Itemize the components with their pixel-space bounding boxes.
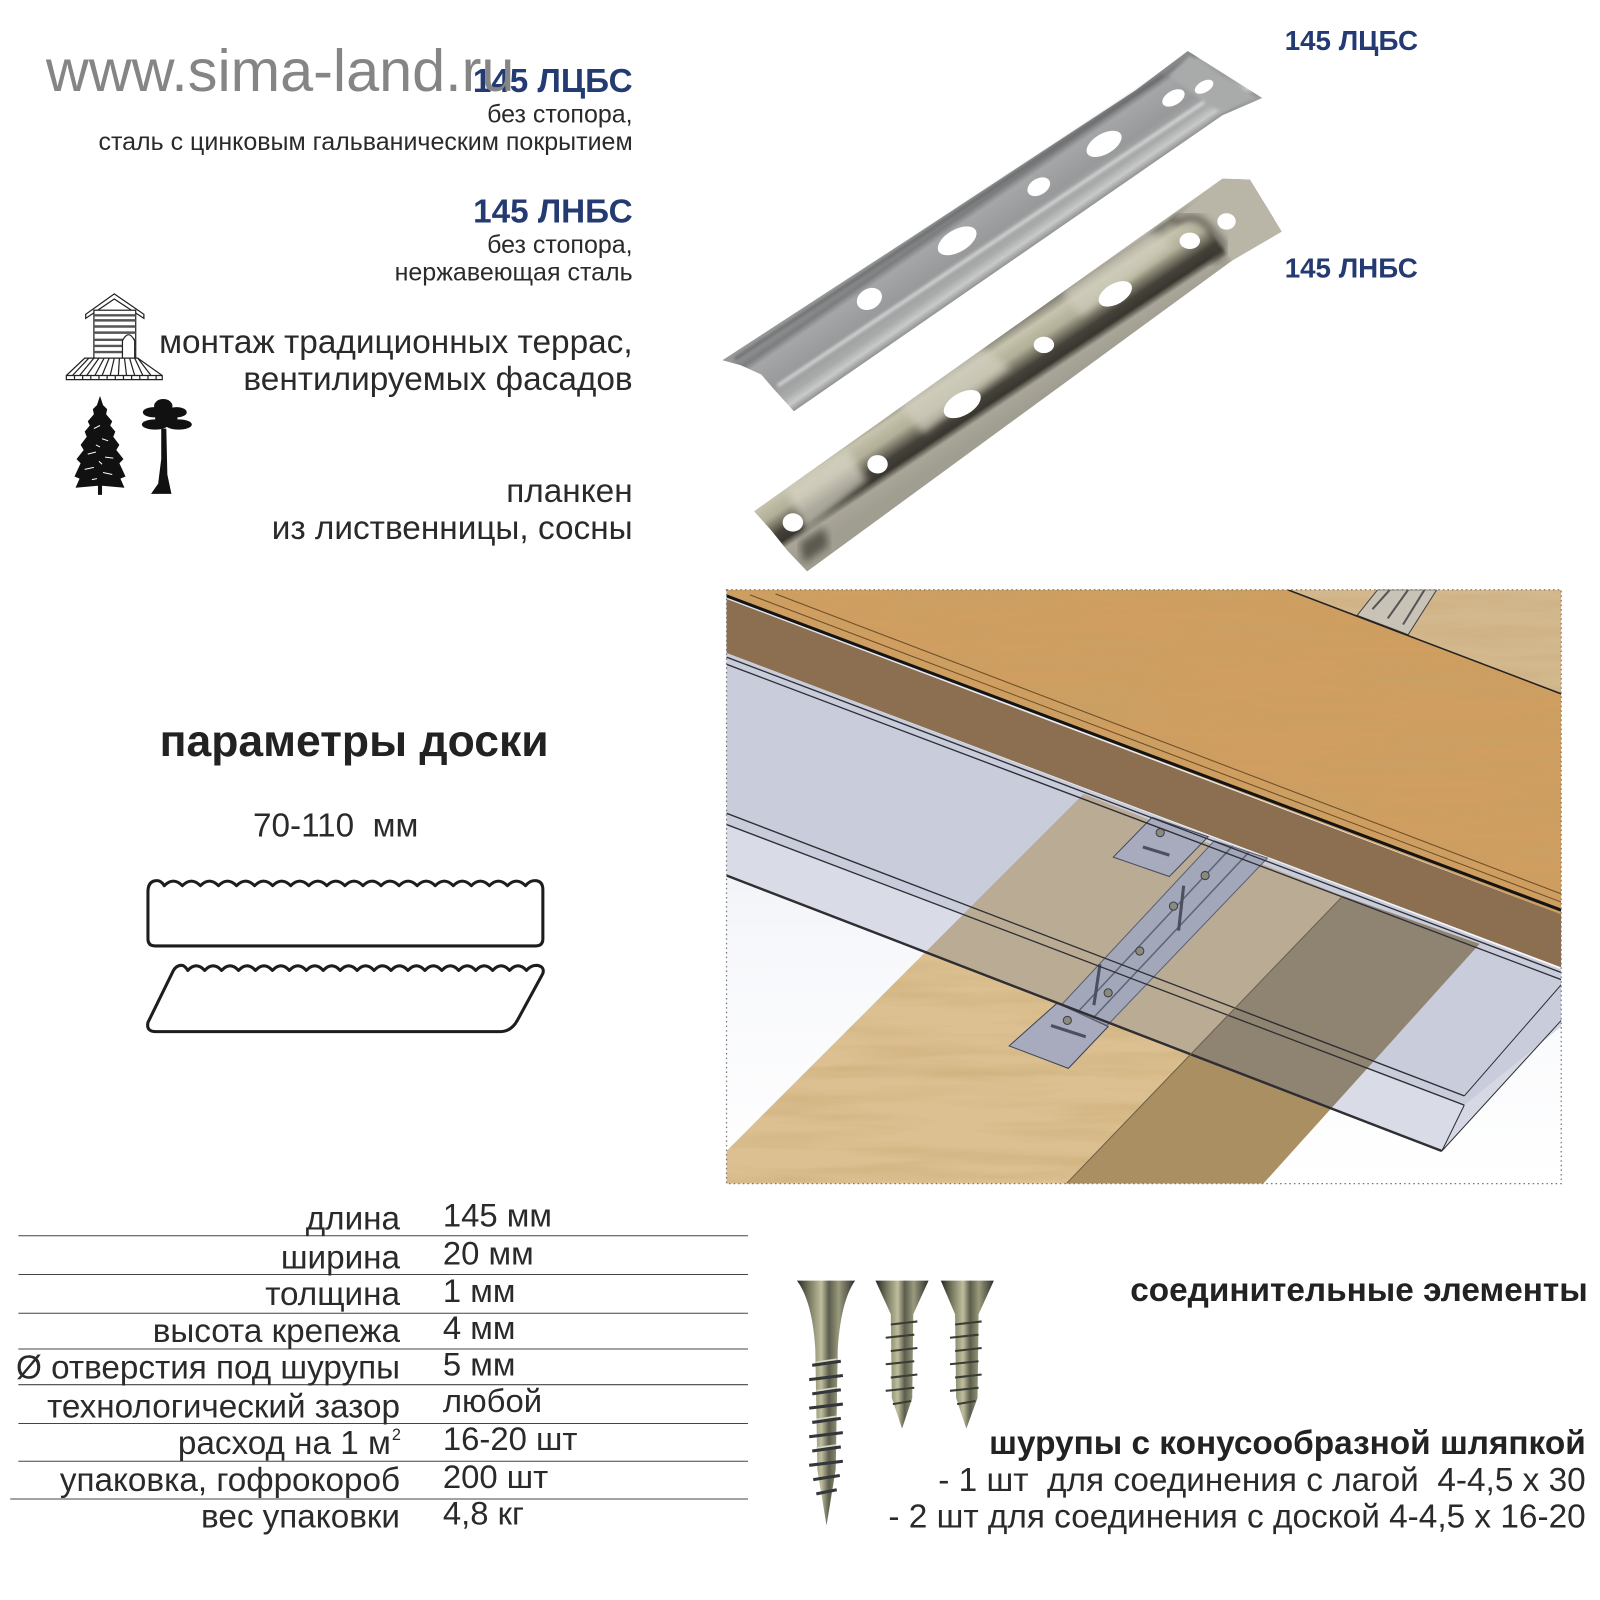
- photo: stainless fastening strip: [754, 176, 1286, 571]
- translucent board: [727, 653, 1561, 1151]
- table: specifications: 200 шт: [443, 1458, 548, 1495]
- product heading: 145 ЛНБС description: нержавеющая сталь: [395, 259, 633, 287]
- product heading: 145 ЛЦБС description: 145 ЛЦБС: [473, 63, 633, 100]
- heading: connecting elements: соединительные элементы: [1130, 1272, 1588, 1309]
- dimension: board width: 70-110 мм: [253, 808, 418, 845]
- diagram: rectangular board profile: [148, 881, 543, 946]
- photo: short screw 1: [876, 1281, 929, 1429]
- table: specifications: ширина: [281, 1239, 401, 1276]
- table: specifications: 5 мм: [443, 1346, 515, 1383]
- table: specifications: 20 мм: [443, 1234, 534, 1271]
- table: specifications: расход на 1 м: [178, 1425, 391, 1462]
- diagram: bevelled board profile: [148, 965, 543, 1032]
- table: specifications: упаковка, гофрокороб: [60, 1462, 400, 1499]
- product heading: 145 ЛНБС description: без стопора,: [487, 231, 633, 259]
- table: specifications: высота крепежа: [153, 1313, 401, 1350]
- table: specifications: 2: [392, 1426, 401, 1444]
- table: specifications: 1 мм: [443, 1272, 515, 1309]
- icon: house with deck: [66, 294, 162, 380]
- product heading: 145 ЛНБС description: 145 ЛНБС: [473, 193, 633, 230]
- label: 145 ЛНБС strip: 145 ЛНБС: [1285, 253, 1418, 284]
- text: screw specification: - 2 шт для соединения с доской 4-4,5 x 16-20: [888, 1499, 1586, 1536]
- photo: short screw 2: [941, 1281, 994, 1429]
- label: 145 ЛЦБС strip: 145 ЛЦБС: [1285, 25, 1418, 56]
- product heading: 145 ЛЦБС description: [98, 63, 633, 156]
- text: wood species: планкен: [506, 473, 633, 510]
- product heading: 145 ЛНБС description: [395, 193, 633, 287]
- illustration: installed decking cross-section: [727, 590, 1561, 1184]
- icon: pine tree: [142, 399, 192, 494]
- icon: larch tree: [74, 396, 126, 495]
- text: screw specification: шурупы с конусообразной шляпкой: [989, 1425, 1586, 1462]
- text: screw specification: - 1 шт для соединения с лагой 4-4,5 x 30: [938, 1462, 1586, 1499]
- table: specifications: вес упаковки: [201, 1499, 400, 1536]
- text: wood species: [272, 473, 633, 547]
- text: application: вентилируемых фасадов: [243, 361, 633, 398]
- light joist: [726, 953, 1190, 1184]
- table: specifications: 4,8 кг: [443, 1494, 524, 1531]
- table: specifications: 16-20 шт: [443, 1420, 577, 1457]
- photo: long screw: [797, 1281, 855, 1526]
- table: specifications: любой: [443, 1382, 542, 1419]
- table: specifications: [10, 1197, 748, 1536]
- table: specifications: технологический зазор: [47, 1388, 400, 1425]
- text: wood species: из лиственницы, сосны: [272, 510, 633, 547]
- bracket plates and rail: [1113, 817, 1208, 877]
- product heading: 145 ЛЦБС description: сталь с цинковым гальваническим покрытием: [98, 128, 633, 156]
- board edges: [727, 657, 1561, 1184]
- heading: board parameters: параметры доски: [160, 717, 549, 766]
- product heading: 145 ЛЦБС description: без стопора,: [487, 100, 633, 128]
- text: application: [159, 324, 633, 398]
- text: screw specification: [888, 1425, 1586, 1536]
- photo: galvanized fastening strip: [722, 51, 1262, 411]
- table: specifications: 145 мм: [443, 1197, 552, 1234]
- table: specifications: длина: [306, 1201, 401, 1238]
- table: specifications: толщина: [265, 1276, 400, 1313]
- watermark: site address: www.sima-land.ru: [45, 37, 514, 104]
- text: application: монтаж традиционных террас,: [159, 324, 633, 361]
- table: specifications: 4 мм: [443, 1309, 515, 1346]
- table: specifications: Ø отверстия под шурупы: [16, 1350, 400, 1387]
